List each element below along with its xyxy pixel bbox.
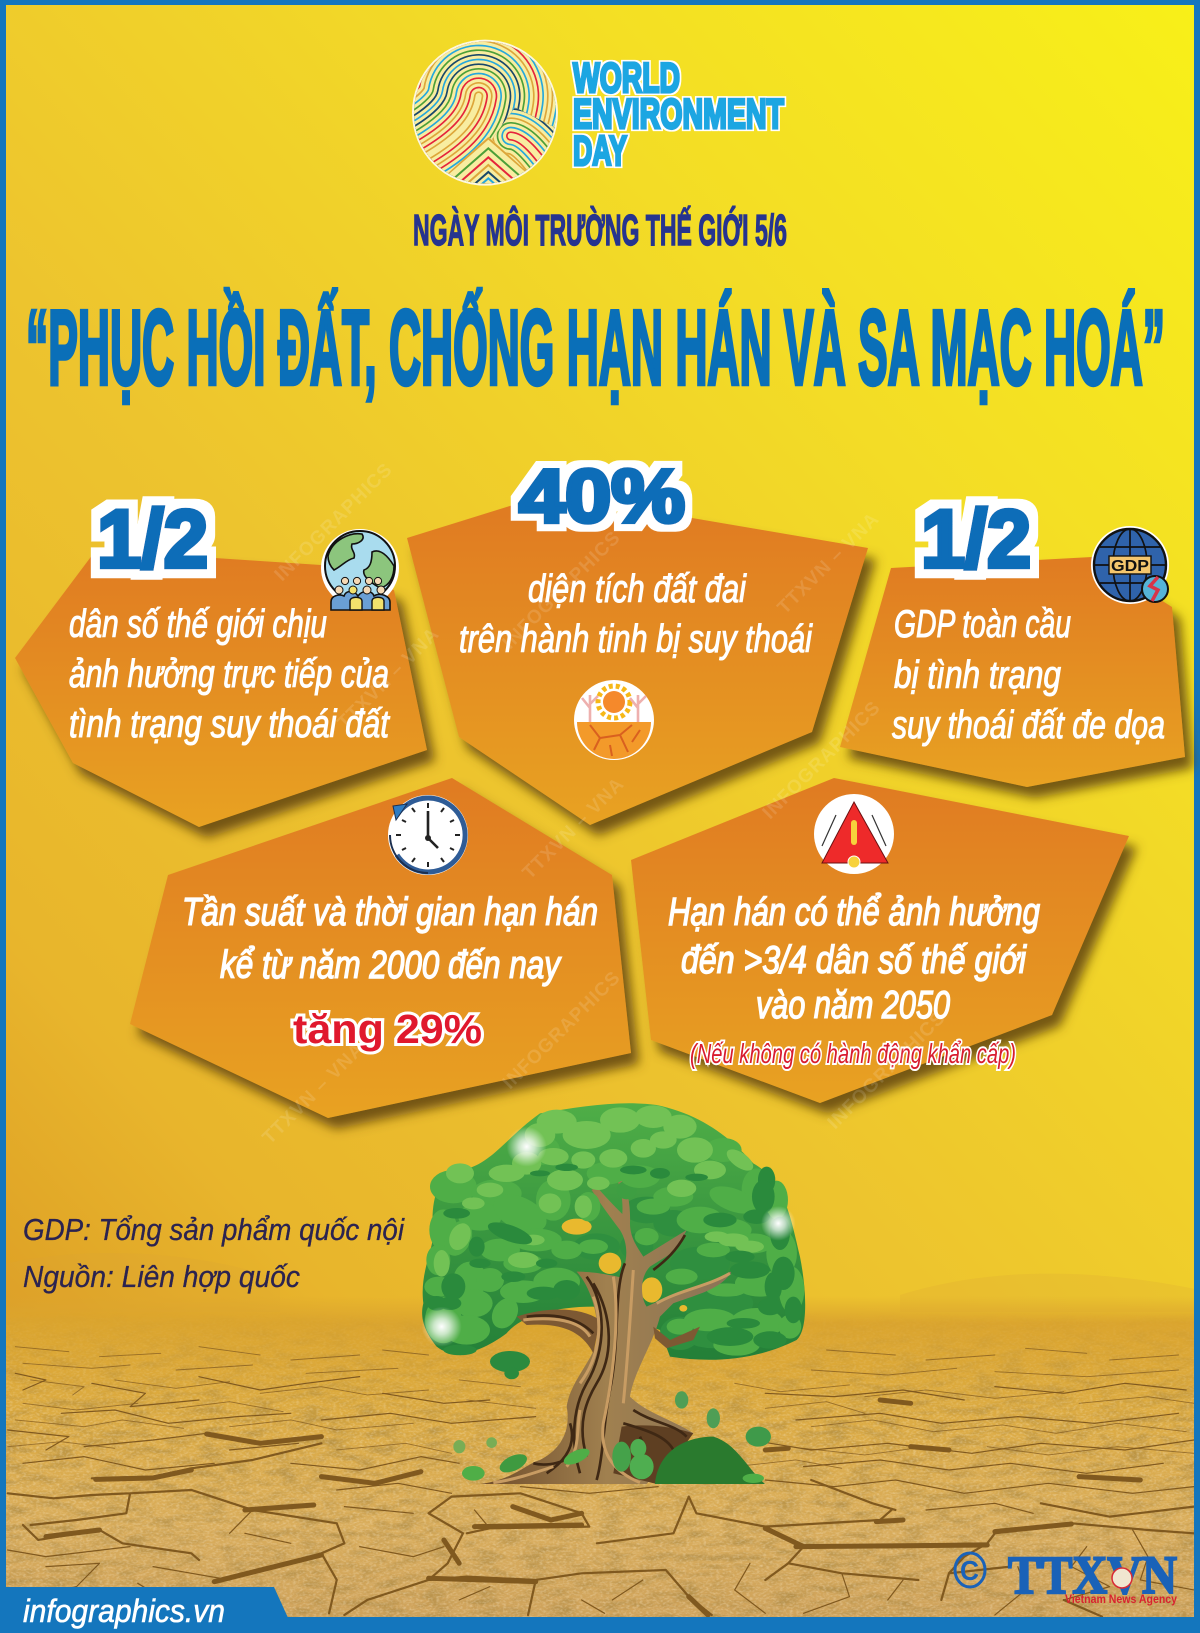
- stat: 40 percent: 40%: [519, 454, 685, 538]
- cracked earth ground: [0, 1296, 1200, 1633]
- watermarks: INFOGRAPHICS: [499, 527, 625, 654]
- panel text: Tần suất và thời gian hạn hán: [182, 891, 598, 934]
- watermarks: INFOGRAPHICS: [824, 1007, 950, 1134]
- right border: [1194, 0, 1200, 1633]
- logo: World Environment Day wordmark: [573, 54, 784, 174]
- panel text: [892, 603, 1165, 747]
- watermarks: TTXVN – VNA: [334, 624, 444, 734]
- panel text: ảnh hưởng trực tiếp của: [69, 653, 389, 696]
- panel text: [459, 568, 813, 661]
- panel: drought frequency: [130, 778, 631, 1118]
- panel: drought forecast 2050: [631, 778, 1129, 1103]
- icon: globe with people: [321, 529, 399, 610]
- footer bar: [0, 1617, 1200, 1633]
- falling leaf cluster: [453, 1351, 771, 1453]
- panel: 40 percent of land: [407, 454, 868, 825]
- icon: parched land and sun: [574, 680, 654, 760]
- panel text: vào năm 2050: [756, 984, 950, 1027]
- watermarks: TTXVN – VNA: [259, 1039, 369, 1149]
- icon: GDP globe: GDP: [1111, 558, 1149, 575]
- icon: clock: [388, 795, 468, 875]
- subtitle: NGÀY MÔI TRƯỜNG THẾ GIỚI 5/6: [413, 204, 787, 255]
- copyright TTXVN logo: TTXVN: [1008, 1545, 1177, 1605]
- footer tab: [0, 1587, 289, 1629]
- panel text: dân số thế giới chịu: [69, 603, 327, 646]
- watermarks: INFOGRAPHICS: [271, 459, 397, 586]
- footnote: GDP definition and source: GDP: Tổng sản phẩm quốc nội: [23, 1212, 405, 1247]
- watermarks: TTXVN – VNA: [774, 509, 884, 619]
- panel text: đến >3/4 dân số thế giới: [681, 939, 1027, 982]
- icon: warning triangle: [814, 794, 894, 874]
- distant hills: [0, 1253, 1200, 1312]
- panel text: kể từ năm 2000 đến nay: [220, 944, 562, 987]
- top border: [0, 0, 1200, 5]
- dark green leaves: [427, 1164, 802, 1355]
- panel text: [69, 603, 391, 746]
- left border: [0, 0, 6, 1633]
- stat: one half: 1/2: [97, 494, 208, 585]
- panel: half of global GDP: [840, 494, 1185, 787]
- copyright TTXVN logo: [955, 1545, 1177, 1606]
- footnote: GDP definition and source: Nguồn: Liên hợp quốc: [23, 1259, 300, 1294]
- mid green leaves: [424, 1135, 804, 1356]
- logo: World Environment Day wordmark: WORLD: [573, 54, 680, 101]
- logo: World Environment Day wordmark: ENVIRONMENT: [573, 90, 784, 137]
- sparkles: [422, 1127, 796, 1347]
- watermarks: [259, 459, 950, 1149]
- canopy base: [422, 1103, 805, 1360]
- moss mound and ground plants: [462, 1437, 765, 1484]
- panel text: [182, 891, 598, 987]
- panel text: Hạn hán có thể ảnh hưởng: [668, 891, 1040, 934]
- note: no urgent action: (Nếu không có hành động khẩn cấp): [690, 1038, 1016, 1069]
- trunk and branches: [480, 1175, 733, 1484]
- stat: one half: 1/2: [921, 494, 1031, 585]
- logo: fingerprint circle: [412, 40, 558, 186]
- panel text: [668, 891, 1040, 1027]
- watermarks: TTXVN – VNA: [519, 774, 629, 884]
- panel text: bị tình trạng: [894, 654, 1061, 697]
- logo: World Environment Day wordmark: DAY: [573, 127, 627, 174]
- panel text: trên hành tinh bị suy thoái: [459, 618, 813, 661]
- foliage behind the branches: [573, 1197, 753, 1350]
- light green leaves: [434, 1105, 764, 1277]
- watermarks: INFOGRAPHICS: [499, 967, 625, 1094]
- icon: GDP globe: [1091, 526, 1169, 604]
- copyright TTXVN logo: C: [960, 1555, 979, 1586]
- gaps in foliage: [562, 1219, 687, 1312]
- footnote: GDP definition and source: [23, 1212, 405, 1294]
- panel text: GDP toàn cầu: [894, 603, 1071, 646]
- copyright TTXVN logo: Vietnam News Agency: [1065, 1592, 1177, 1606]
- footer tab: infographics.vn: [23, 1593, 225, 1629]
- panel text: tình trạng suy thoái đất: [69, 703, 391, 746]
- watermarks: INFOGRAPHICS: [759, 697, 885, 824]
- panel: half of world population: [15, 494, 427, 827]
- highlighted figure: up 29 percent: tăng 29%: [293, 1006, 482, 1052]
- illustration: green tree: [422, 1103, 805, 1484]
- panel text: diện tích đất đai: [528, 568, 747, 611]
